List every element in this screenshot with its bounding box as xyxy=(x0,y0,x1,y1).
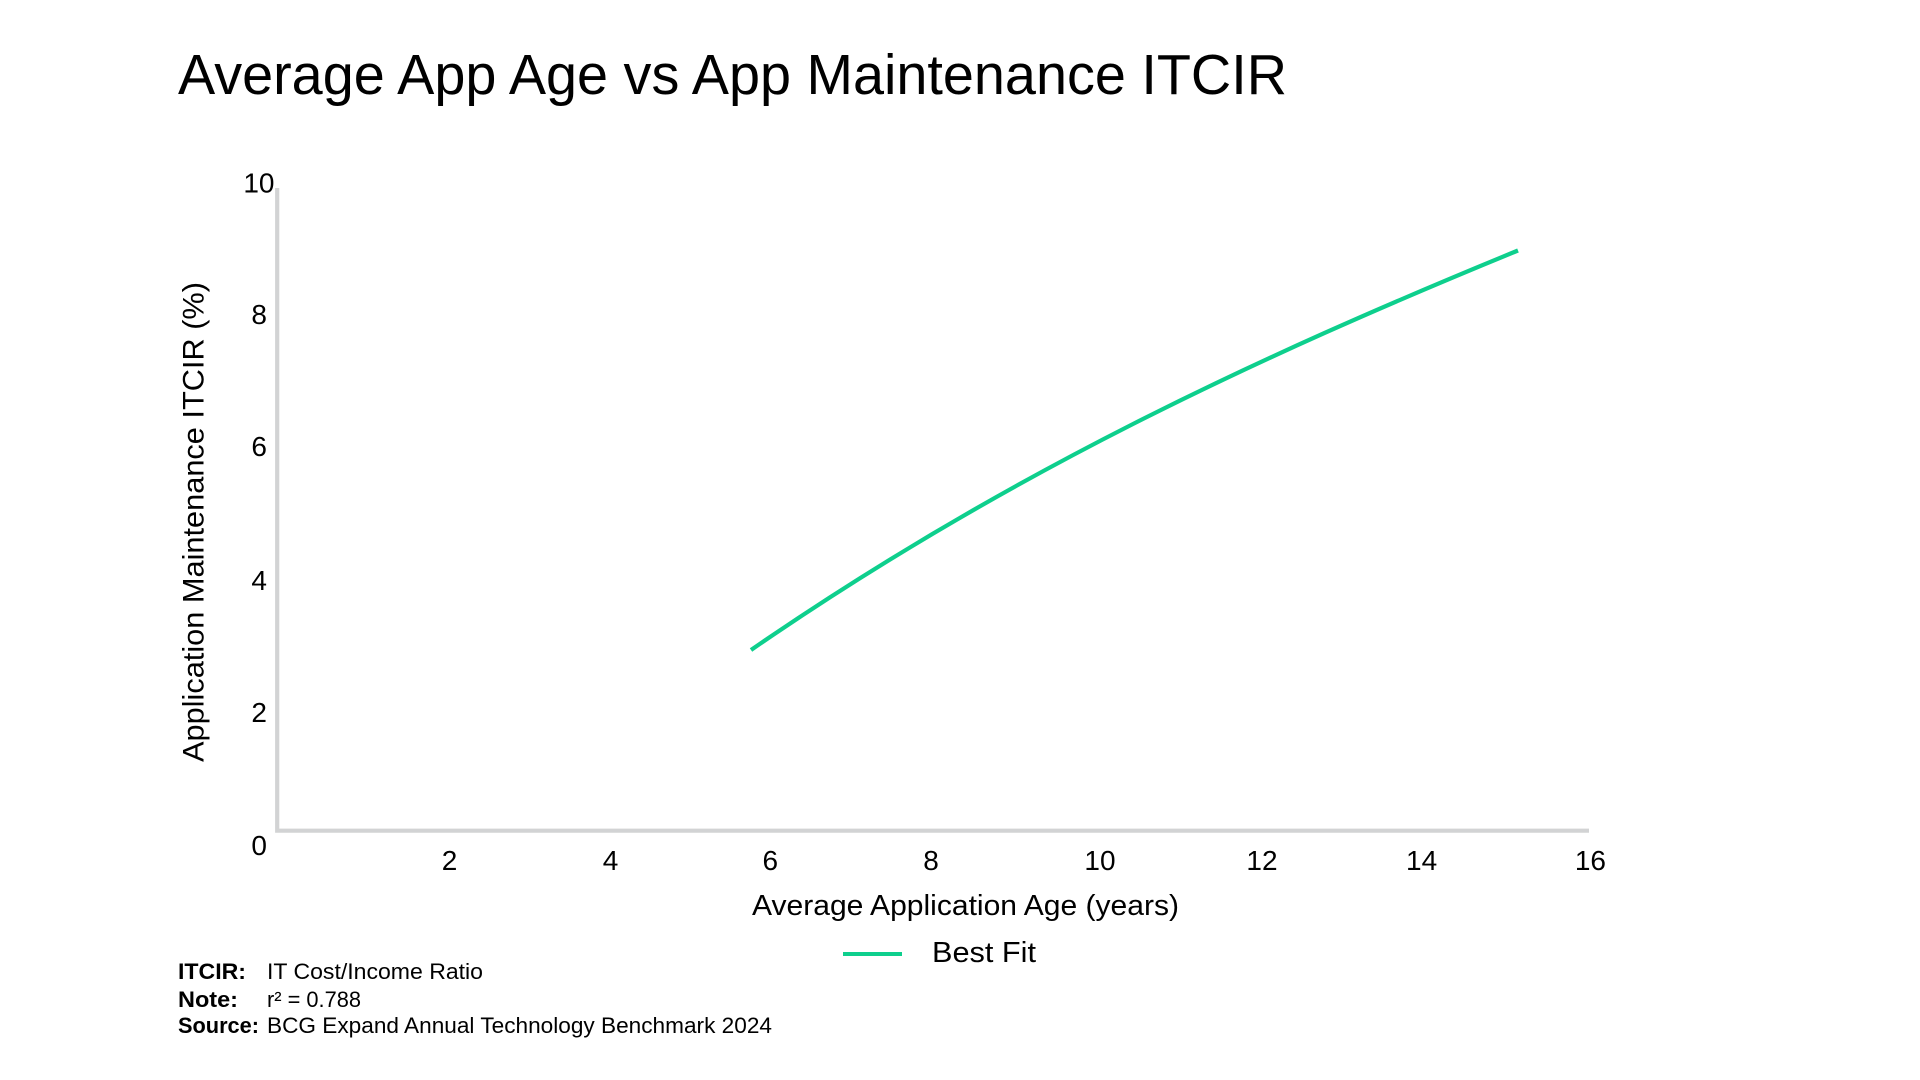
y axis tick labels: 8 xyxy=(251,299,267,330)
x axis tick labels: 6 xyxy=(763,845,778,876)
y axis tick labels: 6 xyxy=(251,431,267,462)
x axis tick labels: 12 xyxy=(1246,845,1278,876)
y axis title: Application Maintenance ITCIR (%) xyxy=(177,282,210,762)
footnote: source: BCG Expand Annual Technology Benchmark 2024 xyxy=(267,1013,772,1038)
y axis tick labels: 10 xyxy=(243,167,274,198)
legend xyxy=(843,937,1036,969)
best fit curve xyxy=(751,250,1518,650)
x axis tick labels: 8 xyxy=(923,845,939,876)
footnote: source: Source: xyxy=(178,1013,259,1038)
footnote: ITCIR: IT Cost/Income Ratio xyxy=(267,959,483,984)
footnote: ITCIR: ITCIR: xyxy=(178,959,246,984)
legend line sample xyxy=(843,952,902,956)
footnote: ITCIR xyxy=(178,959,483,984)
legend label: Best Fit xyxy=(932,937,1036,969)
x axis tick labels: 2 xyxy=(442,845,457,876)
y axis tick labels: 2 xyxy=(251,697,267,728)
x axis tick labels: 16 xyxy=(1575,845,1606,876)
footnote: note: r² = 0.788 xyxy=(267,987,361,1012)
x axis tick labels: 10 xyxy=(1084,845,1116,876)
footnote: note: Note: xyxy=(178,987,238,1012)
y axis tick labels xyxy=(243,167,274,861)
chart axes xyxy=(277,188,1589,831)
title: Average App Age vs App Maintenance ITCIR xyxy=(178,43,1287,107)
x axis tick labels: 14 xyxy=(1406,845,1437,876)
x axis title: Average Application Age (years) xyxy=(752,890,1179,922)
x axis tick labels: 4 xyxy=(603,845,618,876)
footnote: note xyxy=(178,987,361,1012)
y axis tick labels: 4 xyxy=(251,565,267,596)
y axis tick labels: 0 xyxy=(251,830,267,861)
footnotes xyxy=(178,959,772,1038)
x axis tick labels xyxy=(442,845,1606,876)
line chart: app age vs maintenance ITCIR xyxy=(177,167,1606,969)
